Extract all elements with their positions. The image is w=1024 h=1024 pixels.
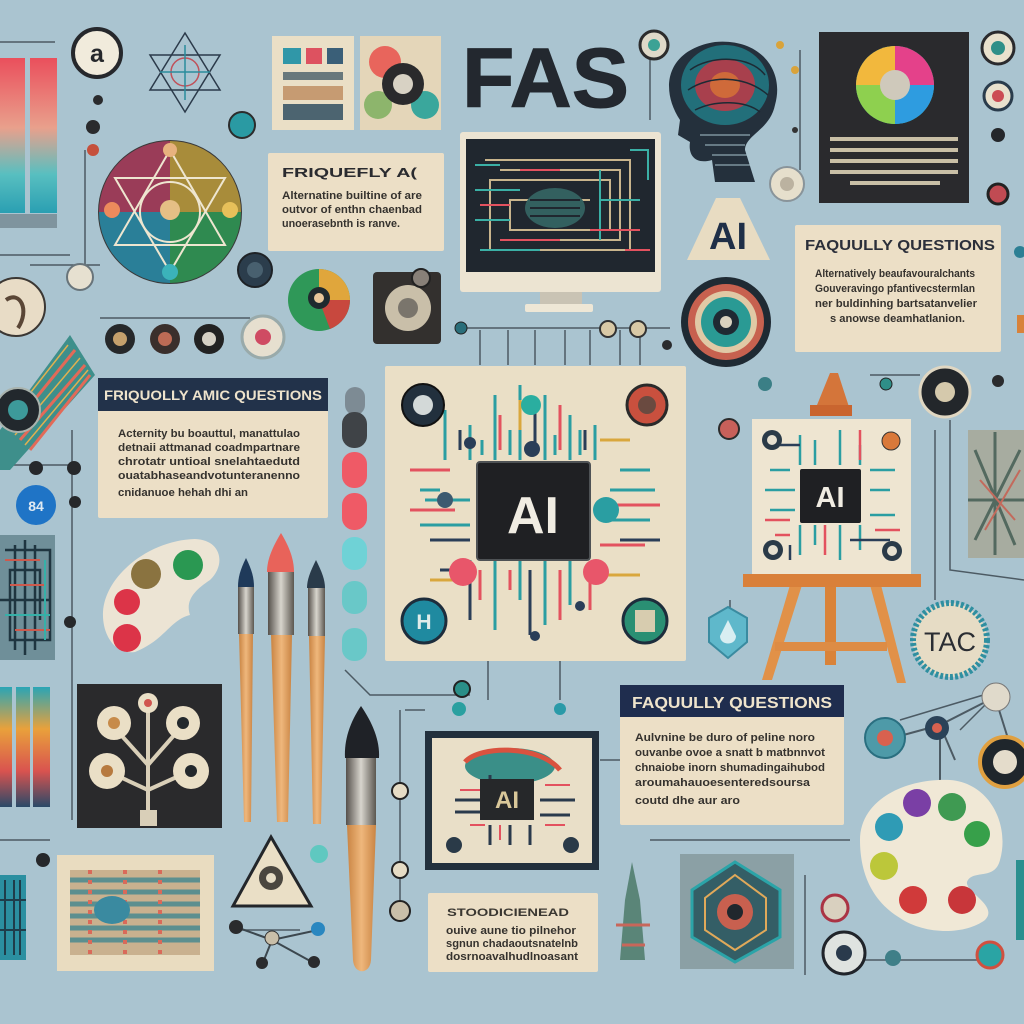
dark tree panel [77, 684, 222, 828]
gradient bars bottom left [0, 687, 50, 807]
triangle eye [233, 837, 311, 906]
easel with AI canvas: AI [816, 482, 844, 514]
panel: frequently questions right: s anowse deamhatlanion. [830, 313, 965, 325]
AI trapezoid label: AI [709, 216, 747, 258]
row of nodes above canvas [455, 321, 772, 391]
panel: frequently card: outvor of enthn chaenbad [282, 204, 422, 216]
small nodes near easel [709, 367, 1004, 658]
card: camera art [360, 36, 441, 130]
badge TAC: TAC [924, 627, 976, 657]
panel: bottom text card: sgnun chadaoutsnatelnb [446, 938, 578, 950]
circuit art left [0, 535, 55, 660]
right column nodes [982, 32, 1024, 333]
corner badges: H [416, 611, 432, 634]
palette right [860, 780, 1003, 931]
panel: frequently questions lower: aroumahauoesenteredsoursa [635, 777, 811, 789]
panel: frequently questions lower: Aulvnine be duro of peline noro [635, 732, 815, 744]
gradient bars top left [0, 58, 57, 228]
palette left [103, 539, 219, 652]
corner badges [402, 384, 667, 643]
panel: frequently questions lower: ouvanbe ovoe a snatt b matbnnvot [635, 747, 825, 759]
cards top [272, 36, 354, 130]
panel: frequently questions right: ner buldinhing bartsatanvelier [815, 298, 978, 310]
panel: frequently card [268, 153, 444, 251]
small AI canvas [425, 731, 599, 870]
panel: frequently questions lower: coutd dhe aur aro [635, 795, 740, 807]
panel: frequently questions lower [620, 685, 844, 825]
tower icon [616, 862, 650, 960]
left bottom strip [0, 853, 50, 960]
panel: bottom text card: STOODICIENEAD [447, 907, 569, 919]
monitor [460, 132, 661, 312]
panel: bottom text card: dosrnoavalhudlnoasant [446, 951, 578, 963]
dark panel: color wheel [819, 32, 969, 203]
panel: frequently questions right: Gouveravingo pfantivecstermlan [815, 283, 975, 295]
easel with AI canvas [743, 373, 921, 683]
panel: frequently questions lower: chnaiobe inorn shumadingaihubod [635, 762, 825, 774]
panel: frequently questions right [795, 225, 1001, 352]
bottom nodes [310, 681, 566, 921]
panel: left frequently questions: FRIQUOLLY AMIC QUESTIONS [104, 387, 322, 403]
hexagon eye panel [680, 854, 794, 969]
panel: frequently card: FRIQUEFLY A( [282, 165, 418, 180]
nodes bottom left [229, 920, 325, 969]
bottom right nodes [822, 860, 1024, 974]
color wheel network [99, 141, 241, 283]
chip circuit art [410, 385, 660, 641]
left art strip [0, 335, 95, 470]
art card bottom left [57, 855, 214, 971]
panel: left frequently questions: cnidanuoe hehah dhi an [118, 487, 248, 499]
icon: star network [150, 33, 220, 112]
head with brain [669, 42, 777, 182]
panel: left frequently questions [98, 378, 328, 518]
title: FAS [462, 31, 629, 125]
panel: left frequently questions: detnaii attmanad coadmpartnare [118, 442, 300, 454]
AI trapezoid label [687, 198, 770, 260]
panel: frequently questions right: Alternatively beaufavouralchants [815, 268, 975, 280]
badge TAC [913, 603, 987, 677]
left nodes [16, 461, 81, 628]
art panel right [968, 430, 1024, 558]
panel: left frequently questions: chrotatr untioal snelahtaedutd [118, 456, 300, 468]
icon: top left badge [73, 29, 121, 77]
panel: left frequently questions: ouatabhaseandvotunteranenno [118, 470, 300, 482]
small round icons [105, 253, 441, 358]
target donut [681, 277, 771, 367]
central AI canvas [385, 366, 686, 661]
brushes [238, 533, 379, 971]
panel: bottom text card [428, 893, 598, 972]
panel: left frequently questions: Acternity bu boauttul, manattulao [118, 428, 300, 440]
panel: frequently card: Alternatine builtine of are [282, 190, 422, 202]
chip [477, 462, 590, 560]
left nodes: 84 [28, 498, 44, 514]
panel: frequently questions lower: FAQUULLY QUESTIONS [632, 695, 832, 712]
chip: AI [507, 487, 559, 545]
panel: bottom text card: ouive aune tio pilnehor [446, 925, 577, 937]
small node icons [0, 95, 255, 336]
swatch column [342, 387, 367, 661]
network right bottom [865, 683, 1024, 787]
panel: frequently questions right: FAQUULLY QUESTIONS [805, 237, 995, 254]
small AI canvas: AI [495, 787, 519, 814]
small nodes near head [640, 31, 804, 201]
icon: top left badge: a [90, 40, 105, 68]
panel: frequently card: unoerasebnth is ranve. [282, 218, 400, 230]
